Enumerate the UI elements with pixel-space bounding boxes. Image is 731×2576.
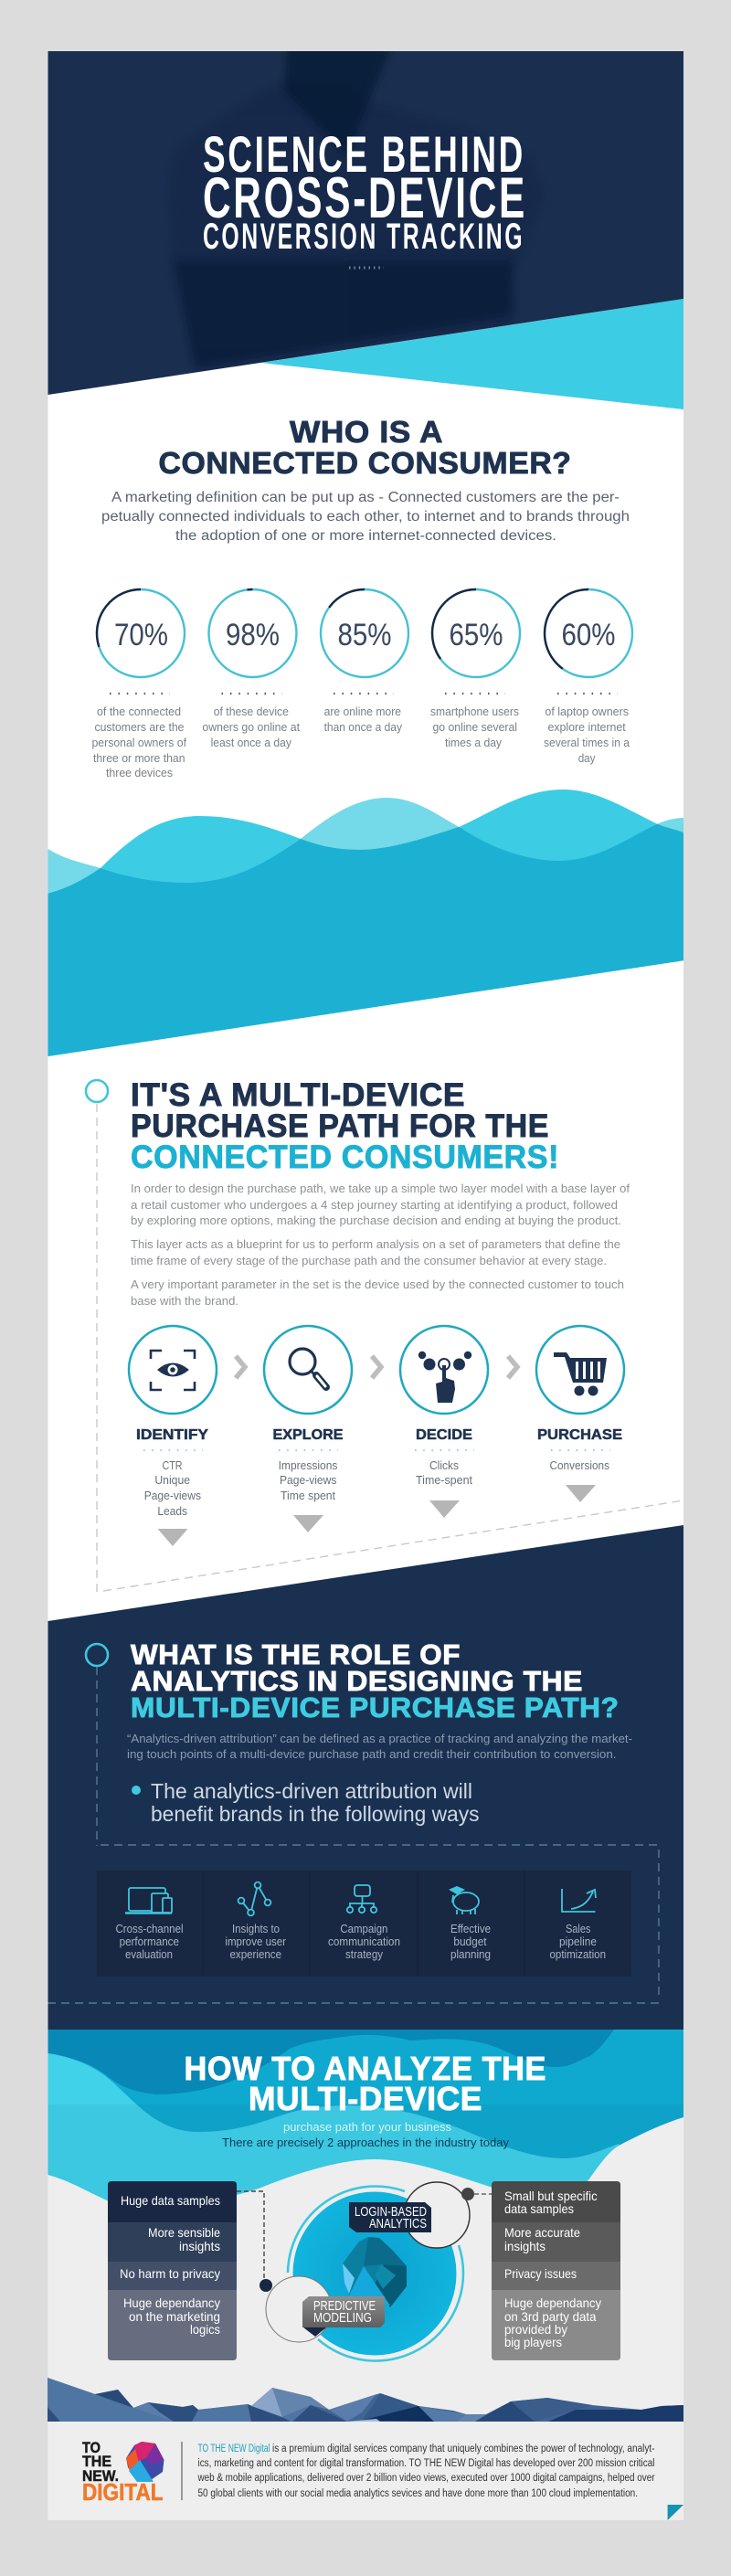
timeline marker xyxy=(86,1080,108,1102)
step: decide: DECIDE xyxy=(416,1427,472,1443)
table: login-based analytics: on the marketing xyxy=(129,2309,220,2324)
front wave xyxy=(48,824,683,1056)
connector right xyxy=(474,2193,492,2195)
body text: This layer acts as a blueprint for us to perform analysis on a set of parameters that define the xyxy=(131,1237,620,1251)
table: login-based analytics: insights xyxy=(179,2239,220,2253)
table: predictive modeling: insights xyxy=(504,2239,546,2253)
stat: 60% xyxy=(527,572,650,765)
timeline marker xyxy=(86,1644,108,1666)
panel: multi-device purchase path xyxy=(86,1077,683,1592)
benefit: cross-channel xyxy=(115,1888,183,1961)
icon: shopping cart xyxy=(554,1352,607,1396)
stat: 70%: 70% xyxy=(114,618,168,652)
heading: MULTI-DEVICE PURCHASE PATH? xyxy=(131,1691,620,1723)
table: predictive modeling: Small but specific xyxy=(504,2189,598,2203)
panel: how to analyze xyxy=(48,2030,683,2520)
panel: footer xyxy=(82,2439,683,2520)
stat: 60%: of laptop owners xyxy=(545,705,629,718)
heading xyxy=(159,416,572,481)
benefit: cross-channel: Cross-channel xyxy=(115,1923,183,1935)
navy background xyxy=(48,1525,683,2030)
title: CROSS-DEVICE xyxy=(203,166,527,230)
stat: 85%: 85% xyxy=(338,618,391,652)
stat: 60%: explore internet xyxy=(548,721,626,734)
step: explore: EXPLORE xyxy=(272,1427,344,1443)
predictive lens xyxy=(266,2276,332,2342)
body text: “Analytics-driven attribution” can be defined as a practice of tracking and analyzing the market- xyxy=(127,1732,632,1745)
table: login-based analytics: More sensible xyxy=(148,2225,220,2240)
body text: by exploring more options, making the purchase decision and ending at buying the product. xyxy=(131,1214,621,1227)
step: explore xyxy=(264,1326,352,1532)
heading xyxy=(131,1077,559,1175)
body text: a retail customer who undergoes a 4 step journey starting at identifying a product, followed xyxy=(131,1198,618,1212)
logo: to the new digital: TO xyxy=(82,2439,101,2456)
approaches line: There are precisely 2 approaches in the industry today xyxy=(222,2136,509,2149)
title xyxy=(203,125,527,257)
definition text: A marketing definition can be put up as - Connected customers are the per- xyxy=(111,490,620,505)
body text: In order to design the purchase path, we take up a simple two layer model with a base layer of xyxy=(131,1182,630,1195)
step: decide: Clicks xyxy=(429,1458,459,1472)
company description xyxy=(197,2443,655,2499)
step: identify xyxy=(129,1326,217,1546)
lower tone band xyxy=(48,2104,683,2232)
connector left xyxy=(237,2191,264,2279)
benefit: budget: Effective xyxy=(450,1923,491,1935)
step: identify: Leads xyxy=(157,1504,187,1518)
label: login-based analytics: LOGIN-BASED xyxy=(355,2205,427,2220)
icon: org chart xyxy=(347,1885,376,1913)
heading: PURCHASE PATH FOR THE xyxy=(131,1108,549,1144)
stat: 65%: smartphone users xyxy=(430,705,519,718)
icon: eye in frame xyxy=(151,1351,195,1390)
benefit: cross-channel: evaluation xyxy=(125,1948,173,1961)
table: login-based analytics: logics xyxy=(190,2322,220,2337)
body text xyxy=(131,1182,630,1308)
dashed connector xyxy=(48,1667,659,2003)
stat: 85%: than once a day xyxy=(324,721,403,734)
benefit: insights: experience xyxy=(230,1948,281,1961)
table: login-based analytics: No harm to privacy xyxy=(120,2266,220,2281)
company description: is a premium digital services company that uniquely combines the power of technology, analyt- xyxy=(272,2443,655,2454)
gem xyxy=(343,2237,407,2307)
stat: 70%: three or more than xyxy=(93,752,185,765)
title: SCIENCE BEHIND xyxy=(203,125,525,183)
heading xyxy=(131,1638,620,1723)
label: predictive modeling xyxy=(302,2296,385,2337)
company description: TO THE NEW Digital xyxy=(197,2443,270,2454)
table: predictive modeling: Huge dependancy xyxy=(504,2295,601,2310)
heading: CONNECTED CONSUMERS! xyxy=(131,1140,559,1175)
stat: 98% xyxy=(202,584,302,749)
label: login-based analytics xyxy=(349,2202,431,2232)
central diagram xyxy=(260,2182,474,2361)
stat: 60%: 60% xyxy=(561,618,616,652)
label: predictive modeling: PREDICTIVE xyxy=(313,2299,376,2314)
definition text xyxy=(101,490,630,544)
heading xyxy=(185,2050,546,2117)
step: explore: Impressions xyxy=(279,1458,338,1472)
table: predictive modeling: Privacy issues xyxy=(504,2266,577,2281)
table: predictive modeling: data samples xyxy=(504,2201,574,2216)
benefit: insights: improve user xyxy=(225,1935,286,1948)
benefit: campaign: strategy xyxy=(345,1948,384,1961)
body text xyxy=(127,1732,632,1761)
heading: IT'S A MULTI-DEVICE xyxy=(131,1077,465,1113)
table: predictive modeling xyxy=(492,2181,620,2360)
stat: 85%: are online more xyxy=(324,705,401,718)
navy hero background xyxy=(48,51,683,395)
panel: role of analytics xyxy=(48,1525,683,2030)
step: identify: Page-views xyxy=(144,1489,201,1502)
step: purchase: PURCHASE xyxy=(537,1427,622,1443)
stat: 98%: owners go online at xyxy=(202,721,301,734)
table: login-based analytics: Huge data samples xyxy=(121,2193,220,2208)
mid wave xyxy=(48,790,683,914)
label: predictive modeling: MODELING xyxy=(313,2311,372,2326)
step: decide xyxy=(400,1326,488,1518)
benefit: sales: optimization xyxy=(550,1948,606,1961)
stat: 65%: go online several xyxy=(433,721,517,734)
dark blue wave xyxy=(48,2030,614,2094)
table: predictive modeling: on 3rd party data xyxy=(504,2309,597,2324)
stat: 98%: of these device xyxy=(214,705,289,718)
benefit: campaign: Campaign xyxy=(340,1923,387,1935)
icon: hand choosing a dot xyxy=(418,1352,471,1403)
cyan wedge xyxy=(261,299,683,409)
stat: 98%: 98% xyxy=(226,618,280,652)
stat: 65% xyxy=(415,572,537,749)
stat: 70%: customers are the xyxy=(95,721,185,734)
panel: hero header xyxy=(48,46,683,409)
dashed path xyxy=(97,1104,683,1592)
benefit: budget: budget xyxy=(453,1935,487,1948)
icon: growth chart xyxy=(562,1889,596,1912)
body text: A very important parameter in the set is the device used by the connected customer to touch xyxy=(131,1277,624,1291)
logo: to the new digital: NEW. xyxy=(82,2467,119,2485)
node dots xyxy=(260,2279,272,2292)
heading: WHAT IS THE ROLE OF xyxy=(131,1638,461,1670)
company description: web & mobile applications, delivered over 2 billion video views, executed over 1000 digital campaigns, helped over xyxy=(197,2473,655,2484)
step: purchase xyxy=(536,1326,624,1502)
stat: 60%: several times in a xyxy=(544,737,630,749)
subheading: purchase path for your business xyxy=(283,2120,451,2134)
icon: connected nodes xyxy=(238,1882,270,1915)
benefit: sales xyxy=(550,1889,606,1961)
heading: MULTI-DEVICE xyxy=(249,2080,482,2117)
stat: 70%: of the connected xyxy=(97,705,181,718)
icon: devices xyxy=(125,1888,172,1913)
login lens xyxy=(404,2182,470,2248)
benefits table xyxy=(97,1871,631,1977)
light wave xyxy=(48,798,683,914)
heading: WHO IS A xyxy=(290,416,443,450)
definition text: petually connected individuals to each other, to internet and to brands through xyxy=(101,509,630,525)
logo: to the new digital xyxy=(82,2439,164,2506)
step: decide: Time-spent xyxy=(416,1473,472,1487)
white infographic sheet xyxy=(48,51,683,1623)
light cyan wave xyxy=(48,2053,619,2248)
benefit statement: benefit brands in the following ways xyxy=(151,1802,479,1826)
stat: 60%: day xyxy=(578,752,596,765)
company description: ics, marketing and content for digital transformation. TO THE NEW Digital has developed over 200 mission critical xyxy=(197,2458,654,2469)
table: predictive modeling: More accurate xyxy=(504,2225,580,2240)
body text: time frame of every stage of the purchase path and the consumer behavior at every stage. xyxy=(131,1254,607,1267)
table: login-based analytics: Huge dependancy xyxy=(123,2295,220,2310)
definition text: the adoption of one or more internet-connected devices. xyxy=(175,528,556,544)
body text: ing touch points of a multi-device purchase path and credit their contribution to conversion. xyxy=(127,1747,616,1761)
panel: wave band xyxy=(48,790,683,1056)
mid-blue base xyxy=(48,2030,683,2249)
grey ground wave xyxy=(48,2117,683,2520)
step: identify: Unique xyxy=(154,1473,190,1487)
benefit: budget: planning xyxy=(450,1948,491,1961)
stat: 65%: times a day xyxy=(445,737,503,749)
stat: 70% xyxy=(86,578,196,779)
title: CONVERSION TRACKING xyxy=(203,217,524,257)
step: identify: CTR xyxy=(163,1458,183,1472)
benefit statement: The analytics-driven attribution will xyxy=(151,1779,472,1803)
logo: to the new digital: THE xyxy=(82,2453,111,2470)
chevron arrows xyxy=(236,1356,517,1378)
logo: to the new digital: DIGITAL xyxy=(82,2478,164,2506)
benefit: campaign: communication xyxy=(328,1935,400,1948)
icon: magnifier xyxy=(290,1349,326,1387)
dotted divider xyxy=(349,267,384,269)
blue disc xyxy=(292,2191,457,2356)
benefit statement xyxy=(151,1779,479,1826)
benefit: campaign xyxy=(328,1885,400,1961)
benefit: sales: Sales xyxy=(566,1923,590,1935)
stat: 70%: personal owners of xyxy=(91,737,187,749)
benefit: insights xyxy=(225,1882,286,1961)
bullet point xyxy=(132,1786,141,1795)
stat: 65%: 65% xyxy=(450,618,503,652)
photo silhouette of man xyxy=(172,51,515,369)
body text: base with the brand. xyxy=(131,1294,238,1308)
heading: CONNECTED CONSUMER? xyxy=(159,447,572,481)
stat: 70%: three devices xyxy=(106,767,173,779)
panel: who is a connected consumer xyxy=(86,416,650,779)
benefit: budget xyxy=(450,1887,491,1961)
benefit: sales: pipeline xyxy=(559,1935,597,1948)
stat: 98%: least once a day xyxy=(211,737,292,749)
stat: 85% xyxy=(303,572,426,734)
benefit: insights: Insights to xyxy=(232,1923,280,1935)
step: explore: Time spent xyxy=(281,1489,335,1502)
heading: ANALYTICS IN DESIGNING THE xyxy=(131,1665,583,1697)
icon: piggy bank xyxy=(450,1887,479,1914)
panel: low-poly mountains xyxy=(48,2378,683,2422)
step: purchase: Conversions xyxy=(550,1458,609,1472)
benefit: cross-channel: performance xyxy=(120,1935,179,1948)
heading: HOW TO ANALYZE THE xyxy=(185,2050,546,2087)
outer ring arcs xyxy=(288,2187,463,2361)
step: identify: IDENTIFY xyxy=(136,1427,208,1443)
table: predictive modeling: provided by xyxy=(504,2322,567,2337)
label: login-based analytics: ANALYTICS xyxy=(369,2217,427,2231)
step: explore: Page-views xyxy=(280,1473,337,1487)
table: login-based analytics xyxy=(108,2181,237,2360)
corner fold xyxy=(668,2505,683,2520)
footer divider xyxy=(181,2442,183,2500)
company description: 50 global clients with our social media analytics sevices and have done more than 100 cloud implementation. xyxy=(197,2488,638,2499)
table: predictive modeling: big players xyxy=(504,2335,562,2349)
